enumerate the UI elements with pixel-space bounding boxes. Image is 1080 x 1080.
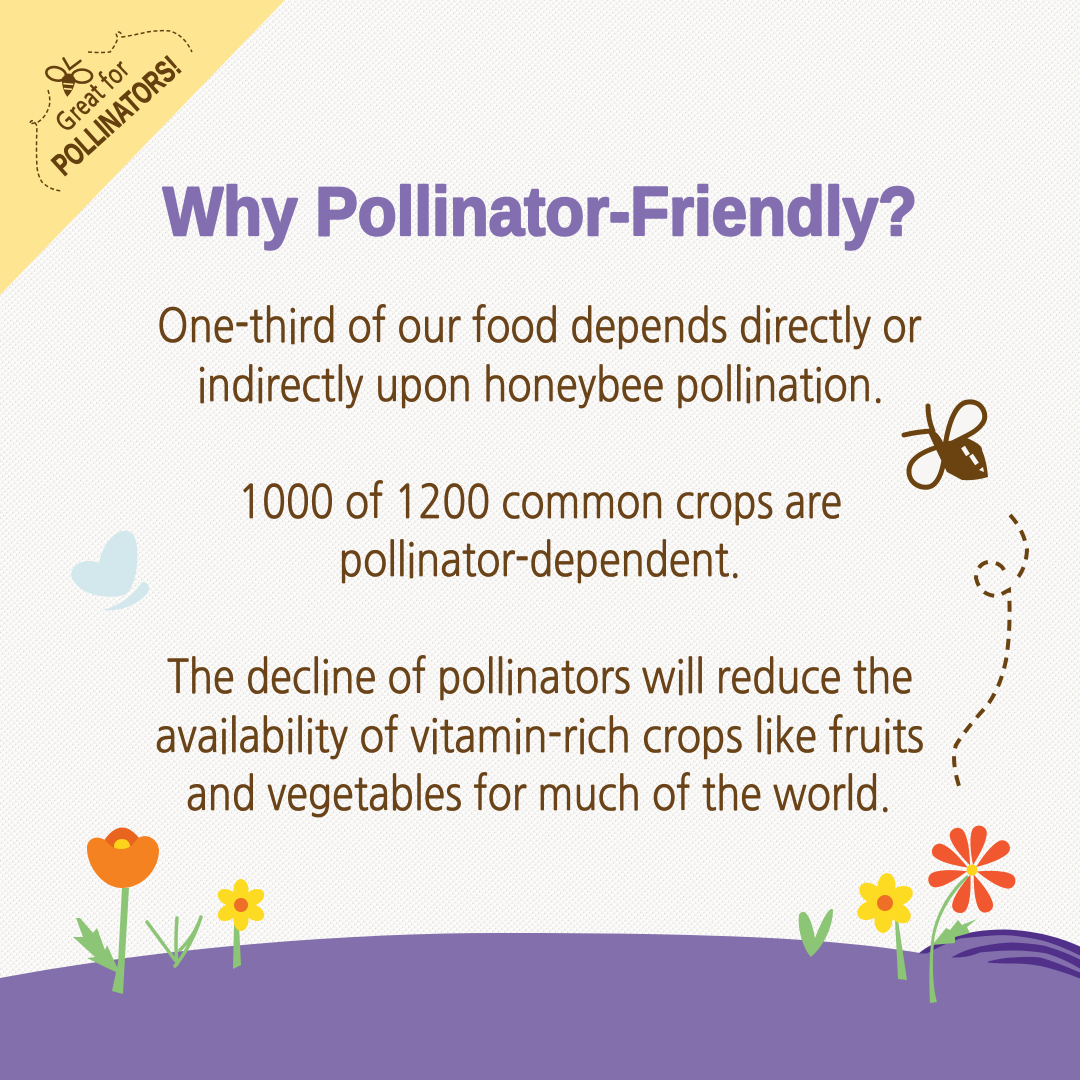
body text: 1000 of 1200 common crops are xyxy=(238,479,842,525)
body text: and vegetables for much of the world. xyxy=(186,771,891,817)
icon: butterfly xyxy=(71,531,149,610)
body text xyxy=(155,303,924,817)
flower: small yellow left xyxy=(215,879,267,969)
body text: One-third of our food depends directly or xyxy=(157,303,921,349)
flower: red daisy xyxy=(927,824,1017,1003)
dark hill waves xyxy=(920,930,1080,978)
badge dashed flight paths xyxy=(30,31,192,191)
plant: green sprout xyxy=(799,909,833,957)
flower: yellow right xyxy=(852,870,918,980)
body text: pollinator-dependent. xyxy=(339,537,741,583)
badge bee icon xyxy=(43,57,94,99)
title: Why Pollinator-Friendly? xyxy=(163,173,917,250)
badge text: POLLINATORS!: POLLINATORS! xyxy=(45,49,188,182)
ground hill xyxy=(0,930,1080,1080)
plant: grass blades xyxy=(147,917,201,966)
icon: large bee xyxy=(904,402,988,487)
body text: The decline of pollinators will reduce the xyxy=(167,654,913,700)
corner banner xyxy=(0,0,285,295)
badge text: Great for: Great for xyxy=(51,55,134,137)
body text: indirectly upon honeybee pollination. xyxy=(197,362,884,408)
dashed flight path xyxy=(954,515,1027,786)
flower: orange poppy xyxy=(73,828,159,994)
badge: great for pollinators xyxy=(30,31,192,191)
body text: availability of vitamin-rich crops like fruits xyxy=(155,713,924,759)
